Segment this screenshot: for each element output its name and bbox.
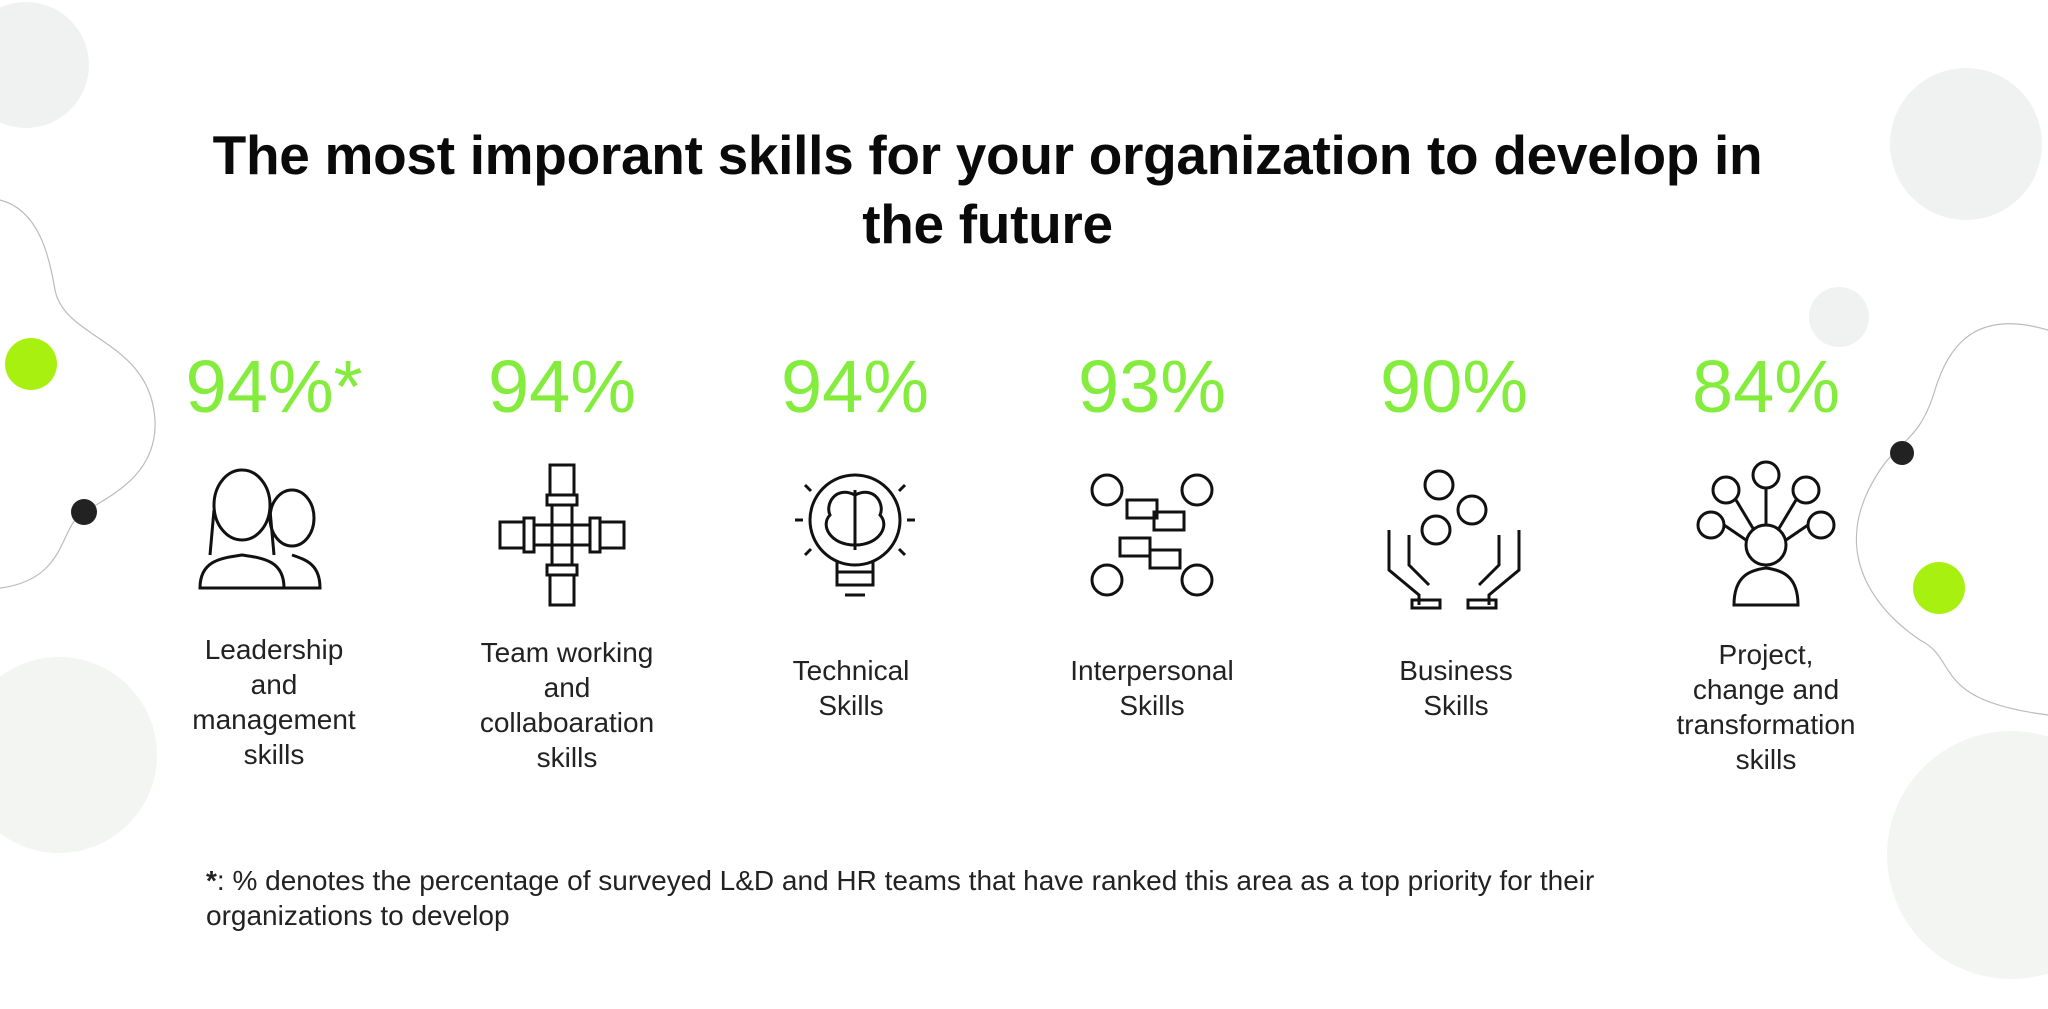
text: 93%	[1078, 345, 1226, 428]
title: the future	[862, 193, 1113, 255]
text: 90%	[1380, 345, 1528, 428]
title	[213, 124, 1762, 255]
label: project: skills	[1736, 744, 1796, 775]
label: leadership: and	[251, 669, 297, 700]
label: leadership: skills	[244, 739, 304, 770]
icon: people	[198, 468, 322, 590]
percentages: 94%*	[186, 345, 362, 428]
label: leadership: Leadership	[205, 634, 343, 665]
label: technical: Skills	[818, 690, 884, 721]
text: 94%	[488, 345, 636, 428]
icon: hands with gears	[1388, 470, 1520, 610]
footnote: organizations to develop	[206, 900, 510, 931]
label: project: transformation	[1677, 709, 1855, 740]
text: 94%	[781, 345, 929, 428]
icon: lightbulb brain	[795, 474, 915, 596]
label: interpersonal: Skills	[1119, 690, 1185, 721]
label: business: Skills	[1423, 690, 1489, 721]
label: leadership	[192, 634, 356, 770]
footnote: *: % denotes the percentage of surveyed L&D and HR teams that have ranked this area as a top priority for their	[206, 865, 1594, 896]
label: project: change and	[1693, 674, 1839, 705]
label: team: skills	[537, 742, 597, 773]
label: team: and	[544, 672, 590, 703]
label: technical: Technical	[793, 655, 909, 686]
label: interpersonal	[1070, 655, 1234, 721]
label: team: collaboaration	[480, 707, 654, 738]
title: The most imporant skills for your organization to develop in	[213, 124, 1762, 186]
icon: person with checks	[1696, 460, 1836, 606]
label: business	[1399, 655, 1513, 721]
label: leadership: management	[192, 704, 356, 735]
label: project	[1676, 639, 1855, 775]
label: technical	[793, 655, 909, 721]
label: team	[480, 637, 654, 773]
icon: interpersonal chat	[1090, 474, 1214, 596]
icon: hands	[498, 464, 626, 606]
label: interpersonal: Interpersonal	[1070, 655, 1234, 686]
label: project: Project,	[1719, 639, 1813, 670]
footnote	[206, 865, 1594, 931]
label: business: Business	[1399, 655, 1513, 686]
text: 84%	[1692, 345, 1840, 428]
label: team: Team working	[481, 637, 653, 668]
